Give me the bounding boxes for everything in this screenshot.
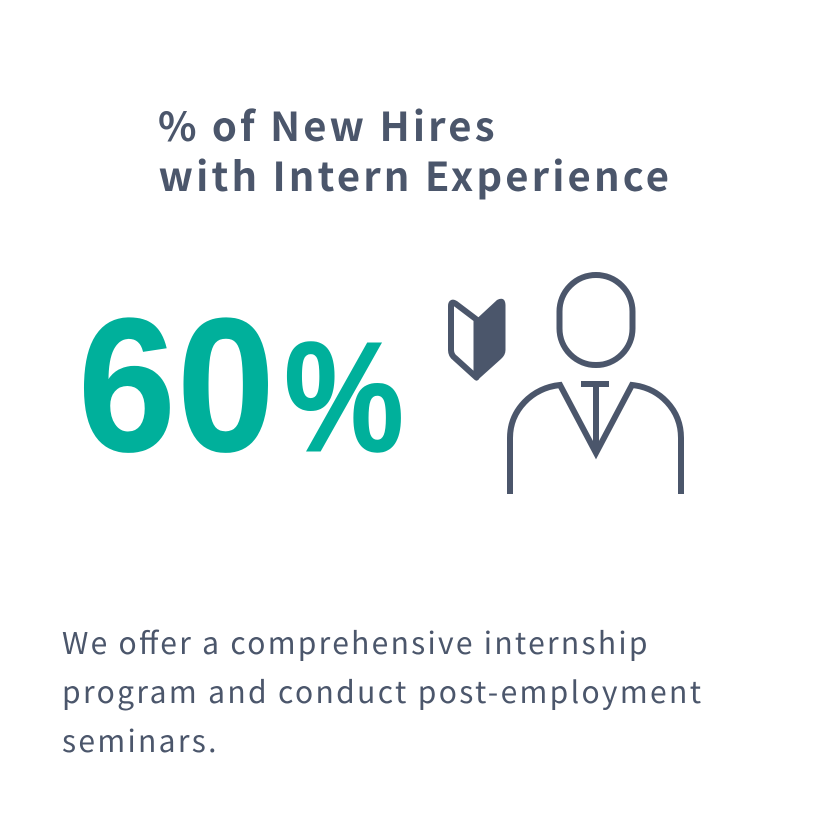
head [560, 275, 632, 365]
body text [62, 619, 701, 761]
tie [581, 384, 609, 447]
icon: person in suit [510, 275, 681, 494]
big number: 60%: 6 [78, 278, 176, 491]
icon: beginner mark shield [451, 299, 506, 381]
big number: 60%: 0 [177, 278, 275, 491]
big number: 60% [78, 278, 404, 491]
body text: program and conduct post-employment [62, 668, 701, 712]
title [158, 95, 669, 203]
title: with Intern Experience [158, 145, 669, 203]
big number: 60%: % [284, 309, 404, 485]
body text: seminars. [62, 717, 216, 761]
body text: We offer a comprehensive internship [62, 619, 648, 663]
shoulders and collar [510, 385, 681, 494]
title: % of New Hires [158, 95, 494, 153]
